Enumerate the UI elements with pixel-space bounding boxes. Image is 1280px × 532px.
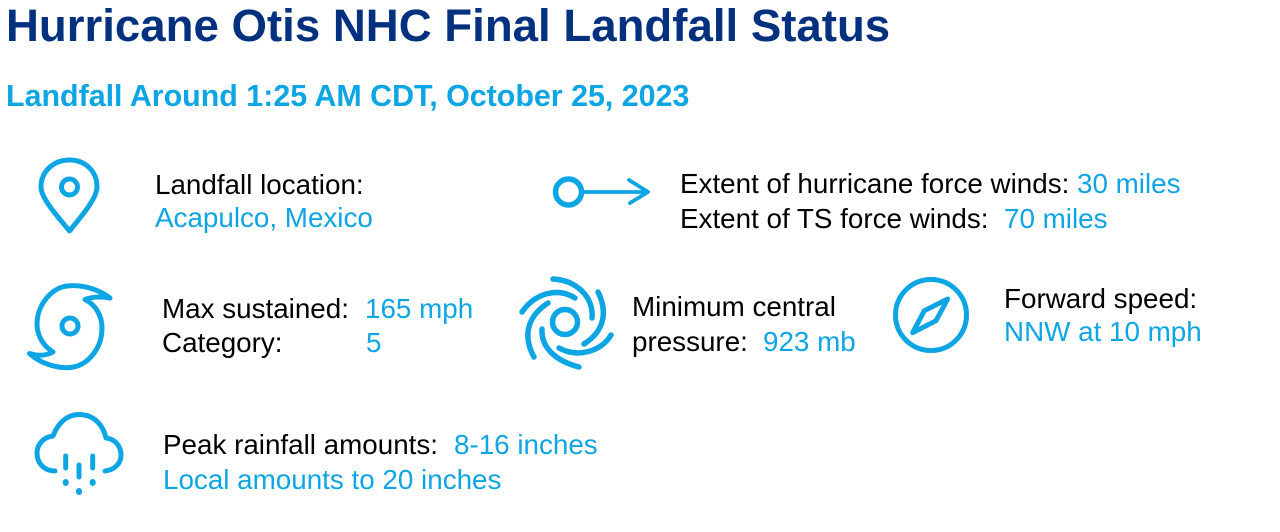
text: peak rainfall: [163, 429, 598, 495]
text: landfall location: [155, 169, 373, 233]
icon: location pin: [41, 160, 97, 231]
text: max sustained winds: Category:: [162, 327, 283, 358]
text: peak rainfall: 8-16 inches: [454, 429, 598, 460]
subtitle: Landfall Around 1:25 AM CDT, October 25, 2023: [6, 79, 689, 113]
text: wind extent: Extent of hurricane force winds:: [680, 168, 1069, 199]
icon: rain cloud: [37, 414, 121, 492]
icon: compass: [896, 280, 966, 350]
text: forward speed: [1004, 283, 1202, 347]
text: peak rainfall: Local amounts to 20 inches: [163, 464, 501, 495]
text: minimum central pressure: pressure:: [632, 326, 748, 357]
text: wind extent: Extent of TS force winds:: [680, 203, 988, 234]
text: max sustained winds: [162, 293, 473, 358]
icon: wind radius arrow: [556, 179, 648, 205]
icon: spiral pressure: [522, 279, 611, 367]
text: wind extent: 70 miles: [1004, 203, 1108, 234]
text: max sustained winds: 165 mph: [365, 293, 473, 324]
text: peak rainfall: Peak rainfall amounts:: [163, 429, 438, 460]
text: landfall location: Acapulco, Mexico: [155, 202, 373, 233]
icon: hurricane: [30, 286, 110, 368]
text: forward speed: NNW at 10 mph: [1004, 316, 1202, 347]
text: max sustained winds: Max sustained:: [162, 293, 349, 324]
text: max sustained winds: 5: [366, 327, 381, 358]
text: minimum central pressure: [632, 291, 856, 357]
text: landfall location: Landfall location:: [155, 169, 364, 200]
text: minimum central pressure: 923 mb: [763, 326, 856, 357]
text: minimum central pressure: Minimum central: [632, 291, 836, 322]
text: wind extent: [680, 168, 1181, 234]
text: wind extent: 30 miles: [1077, 168, 1181, 199]
title: Hurricane Otis NHC Final Landfall Status: [6, 0, 890, 51]
text: forward speed: Forward speed:: [1004, 283, 1197, 314]
